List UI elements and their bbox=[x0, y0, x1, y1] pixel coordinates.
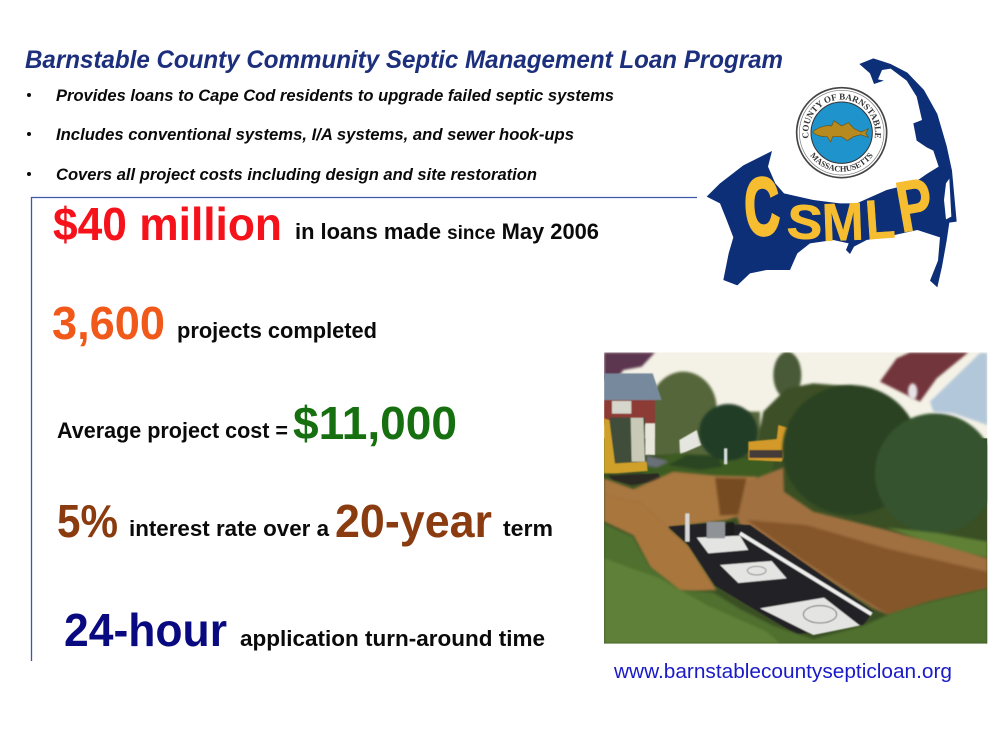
right trench wall bbox=[737, 468, 987, 616]
stat: interest rate and term bbox=[57, 495, 553, 547]
stat: turn-around time: application turn-around time bbox=[240, 626, 545, 651]
dark mid tree bbox=[699, 404, 758, 461]
background trees bbox=[654, 370, 718, 414]
photo: septic system installation bbox=[604, 352, 995, 644]
big shrubs bbox=[782, 385, 919, 515]
stat: loans made: $40 million bbox=[53, 198, 282, 250]
sky bbox=[604, 352, 987, 446]
stat: turn-around time bbox=[64, 604, 545, 656]
stat: interest rate and term: 5% bbox=[57, 495, 118, 547]
CSMLP lettering bbox=[742, 162, 939, 254]
stat: loans made: in loans made since May 2006 bbox=[295, 219, 599, 244]
stat: interest rate and term: term bbox=[503, 516, 553, 541]
CSMLP lettering: P bbox=[890, 164, 939, 248]
stat: projects completed: 3,600 bbox=[52, 297, 165, 349]
bullet list bbox=[27, 87, 614, 184]
stat: projects completed bbox=[52, 297, 377, 349]
CSMLP lettering: M bbox=[821, 191, 865, 252]
title: Barnstable County Community Septic Management Loan Program bbox=[25, 46, 783, 74]
CSMLP lettering: L bbox=[863, 188, 897, 252]
seal text: COUNTY OF BARNSTABLE bbox=[802, 94, 881, 138]
seal text: MASSACHUSETTS bbox=[810, 152, 872, 172]
left bank bbox=[604, 495, 717, 592]
far excavator bbox=[748, 425, 790, 462]
logo: CSMLP Cape Cod map bbox=[706, 58, 957, 288]
white garage bbox=[679, 430, 702, 454]
stat: turn-around time: 24-hour bbox=[64, 604, 227, 656]
brick house bbox=[604, 373, 662, 400]
stat: projects completed: projects completed bbox=[177, 318, 377, 343]
bullet 1: Provides loans to Cape Cod residents to upgrade failed septic systems bbox=[56, 87, 614, 105]
seal text bbox=[802, 94, 881, 172]
concrete tanks in trench bbox=[668, 513, 873, 635]
fish bbox=[813, 121, 868, 142]
stat: average project cost bbox=[57, 397, 457, 449]
foreground grass bbox=[604, 523, 987, 644]
stat: interest rate and term: 20-year bbox=[335, 495, 492, 547]
stat: interest rate and term: interest rate over a bbox=[129, 516, 330, 541]
website link: www.barnstablecountysepticloan.org bbox=[613, 661, 952, 683]
bullet 2: Includes conventional systems, I/A systems, and sewer hook-ups bbox=[56, 126, 574, 144]
blue siding house bbox=[930, 353, 987, 425]
Cape Cod silhouette bbox=[707, 58, 957, 287]
stat: average project cost: $11,000 bbox=[293, 397, 457, 449]
CSMLP lettering: S bbox=[785, 194, 825, 250]
ground base bbox=[604, 438, 987, 644]
stat: average project cost: Average project cost = bbox=[57, 418, 288, 443]
stat: loans made bbox=[53, 198, 599, 250]
county seal bbox=[796, 86, 888, 178]
bullet 3: Covers all project costs including design and site restoration bbox=[56, 166, 537, 184]
lawn and driveway bbox=[644, 452, 772, 476]
excavated soil, left mound bbox=[604, 472, 757, 528]
near excavator bbox=[610, 418, 645, 463]
CSMLP lettering: C bbox=[742, 162, 782, 254]
back lawn strip bbox=[887, 528, 987, 558]
